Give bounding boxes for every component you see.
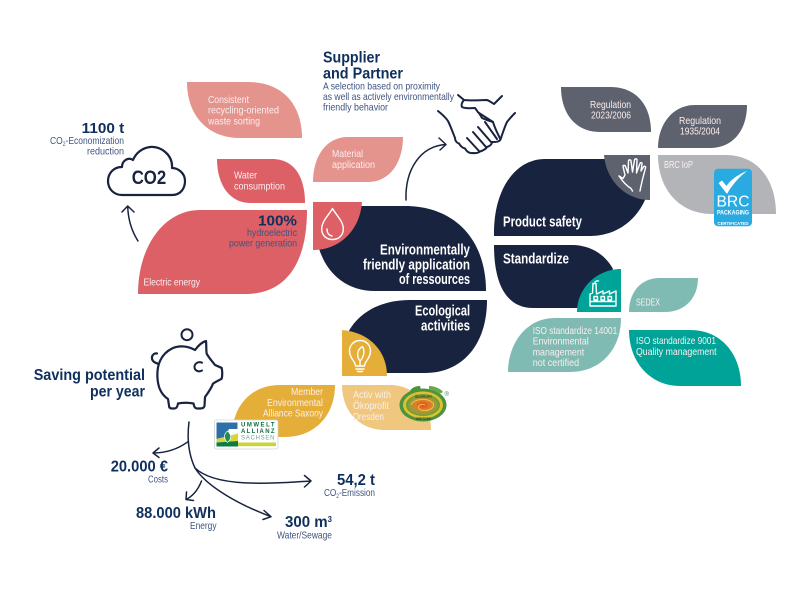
leaf: regulation 2023/2006: 2023/2006	[591, 110, 631, 122]
panel: ecological activities	[345, 300, 487, 373]
figure: CO2 emission: CO	[324, 488, 339, 499]
heading: supplier and partner: A selection based on proximity	[323, 81, 441, 92]
heading: saving potential per year: per year	[90, 384, 145, 401]
logo: BRC packaging certificated: PACKAGING	[717, 210, 749, 216]
leaf: ISO standardize 14001: Environmental	[533, 337, 589, 348]
arrow: to handshake	[406, 138, 446, 200]
CO2 economization figure: reduction	[87, 146, 124, 158]
icon: CO2 cloud: CO2	[132, 168, 166, 189]
panel: ecological activities: Ecological	[415, 304, 470, 320]
panel: standardize: Standardize	[503, 252, 569, 268]
leaf: BRC IoP: BRC IoP	[664, 160, 693, 171]
figure: costs	[111, 459, 168, 485]
leaf: member environmental alliance saxony: Alliance Saxony	[263, 408, 324, 420]
leaf: water consumption: Water	[234, 171, 258, 182]
icon: hand	[604, 155, 650, 200]
logo: BRC packaging certificated	[714, 169, 752, 226]
leaf: electric energy: Electric energy	[144, 278, 201, 288]
leaf: member environmental alliance saxony: Member	[291, 387, 324, 398]
leaf: regulation 1935/2004: Regulation	[679, 116, 721, 127]
arrows: savings branches	[153, 422, 311, 520]
figure: costs: Costs	[148, 474, 168, 485]
icon: light bulb	[342, 330, 387, 376]
icon: water drop	[313, 202, 362, 250]
leaf: electric energy: power generation	[229, 239, 297, 250]
leaf: activ with Oekoprofit Dresden: Dresden	[353, 412, 384, 423]
icon: CO2 cloud	[108, 147, 185, 195]
panel: environmentally friendly application of ressources	[318, 206, 486, 291]
panel: ecological activities: activities	[421, 319, 470, 335]
heading: supplier and partner: as well as actively environmentally	[323, 92, 455, 103]
logo: Umwelt Allianz Sachsen: UMWELT	[241, 422, 275, 428]
panel: product safety	[494, 159, 645, 236]
leaf: regulation 2023/2006: Regulation	[590, 100, 631, 111]
CO2 economization figure: 1100 t	[82, 120, 124, 137]
figure: CO2 emission: 54,2 t	[337, 472, 375, 489]
leaf: ISO standardize 9001	[629, 330, 741, 386]
leaf: regulation 1935/2004: 1935/2004	[680, 126, 720, 138]
leaf: material application: application	[332, 160, 375, 171]
logo: Umwelt Allianz Sachsen	[214, 420, 278, 449]
leaf: ISO standardize 9001: ISO standardize 9001	[636, 336, 716, 347]
leaf: member environmental alliance saxony: Environmental	[267, 398, 323, 409]
figure: energy: Energy	[190, 521, 217, 532]
heading: saving potential per year: Saving potential	[34, 367, 145, 384]
figure: CO2 emission: -Emission	[339, 488, 375, 499]
figure: energy: 88.000 kWh	[136, 505, 216, 522]
heading: supplier and partner: Supplier	[323, 50, 380, 67]
leaf: electric energy	[138, 210, 307, 294]
leaf: activ with Oekoprofit Dresden	[342, 385, 431, 430]
panel: standardize	[494, 245, 613, 308]
icon: factory	[577, 269, 621, 312]
logo: Oekoprofit Dresden: ÖKOPROFIT	[415, 394, 433, 399]
arrow: electric energy to CO2	[122, 206, 138, 241]
logo: BRC packaging certificated: CERTIFICATED	[718, 221, 748, 226]
panel: product safety: Product safety	[503, 215, 582, 231]
leaf: material application	[313, 137, 403, 182]
leaf: ISO standardize 14001: ISO standardize 14001	[533, 326, 617, 337]
leaf: ISO standardize 14001	[508, 318, 621, 372]
leaf: water consumption	[217, 159, 305, 203]
leaf: consistent waste sorting: waste sorting	[207, 116, 260, 128]
logo: BRC packaging certificated: BRC	[716, 194, 750, 211]
leaf: consistent waste sorting	[187, 82, 302, 138]
CO2 economization figure: -Economization	[66, 136, 124, 147]
figure: water and sewage: 300 m	[285, 514, 329, 531]
leaf: ISO standardize 9001: Quality management	[636, 347, 717, 358]
logo: Umwelt Allianz Sachsen: SACHSEN	[241, 436, 274, 442]
leaf: SEDEX: SEDEX	[636, 298, 660, 309]
leaf: regulation 1935/2004	[658, 105, 747, 148]
heading: supplier and partner: friendly behavior	[323, 103, 389, 114]
panel: environmentally friendly application of ressources: Environmentally	[380, 242, 470, 258]
figure: energy	[136, 505, 217, 532]
leaf: consistent waste sorting: recycling-oriented	[208, 106, 279, 117]
figure: water and sewage: Water/Sewage	[277, 530, 332, 542]
heading: saving potential per year	[34, 367, 145, 401]
figure: water and sewage	[277, 514, 333, 542]
heading: supplier and partner	[323, 50, 455, 114]
figure: costs: 20.000 €	[111, 459, 168, 476]
icon: piggy bank	[152, 329, 222, 408]
icon: handshake	[438, 95, 515, 153]
leaf: BRC IoP	[658, 155, 776, 214]
leaf: ISO standardize 14001: not certified	[533, 358, 579, 369]
leaf: member environmental alliance saxony	[232, 385, 335, 437]
leaf: SEDEX	[629, 278, 698, 312]
leaf: electric energy: hydroelectric	[247, 228, 297, 239]
panel: environmentally friendly application of ressources: friendly application	[363, 257, 470, 273]
logo: Umwelt Allianz Sachsen: ALLIANZ	[241, 429, 275, 435]
leaf: activ with Oekoprofit Dresden: Activ with	[353, 390, 391, 401]
panel: environmentally friendly application of ressources: of ressources	[399, 272, 470, 288]
CO2 economization figure: CO	[50, 136, 65, 147]
leaf: ISO standardize 14001: management	[533, 347, 584, 358]
figure: CO2 emission	[324, 472, 375, 500]
leaf: material application: Material	[332, 149, 363, 160]
logo: Oekoprofit Dresden: DRESDEN	[416, 417, 431, 421]
leaf: water consumption: consumption	[234, 182, 285, 192]
heading: supplier and partner: and Partner	[323, 66, 403, 83]
CO2 economization figure: 2	[63, 142, 66, 148]
logo: Oekoprofit Dresden	[400, 386, 450, 422]
logo: Oekoprofit Dresden: ®	[444, 391, 450, 398]
CO2 economization figure	[50, 120, 124, 158]
leaf: electric energy: 100%	[258, 213, 297, 230]
leaf: activ with Oekoprofit Dresden: Ökoprofit	[353, 400, 389, 412]
figure: water and sewage: 3	[328, 515, 333, 524]
leaf: consistent waste sorting: Consistent	[208, 95, 249, 106]
figure: CO2 emission: 2	[336, 494, 340, 500]
leaf: regulation 2023/2006	[561, 87, 651, 132]
